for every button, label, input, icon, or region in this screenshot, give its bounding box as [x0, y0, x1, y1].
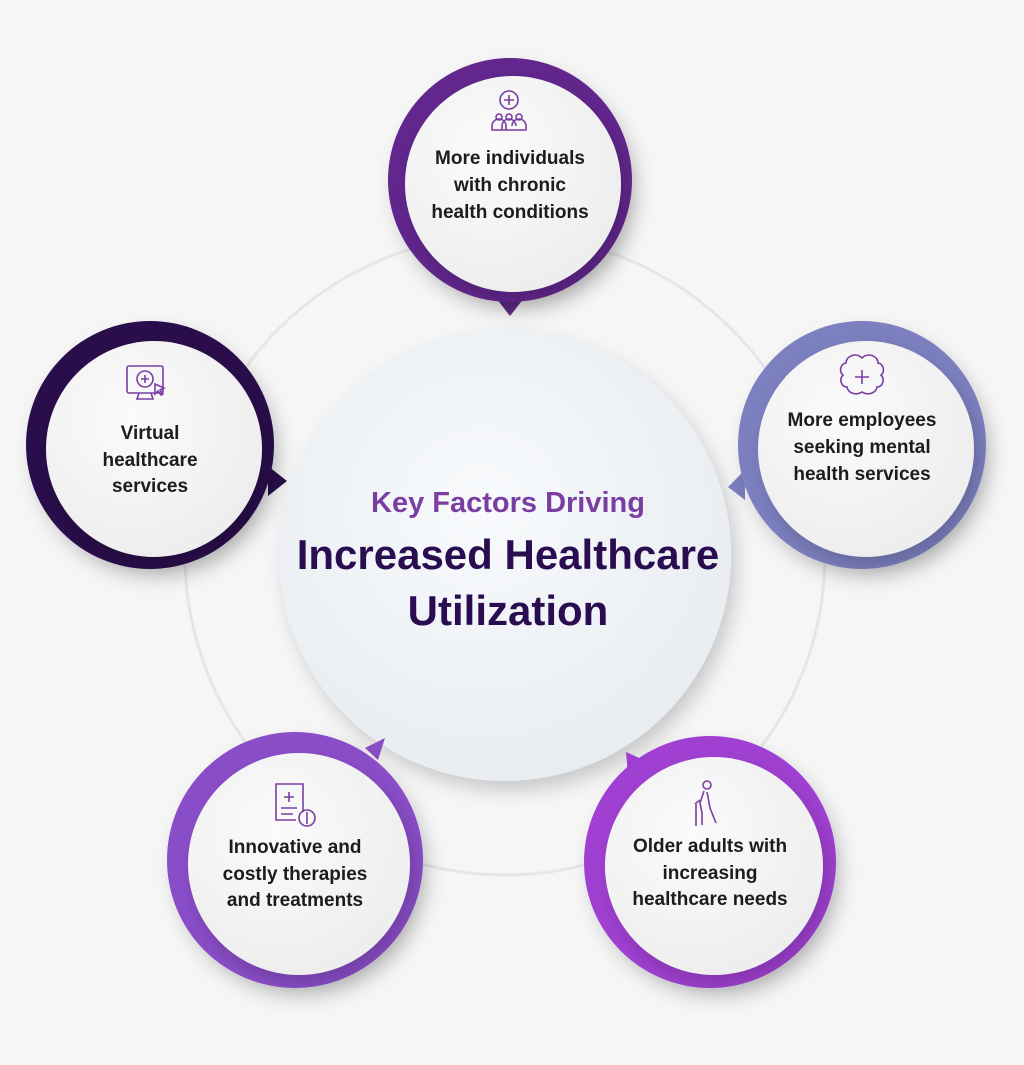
panel: older adults: Older adults with — [633, 836, 787, 857]
icon: people with cross — [492, 91, 526, 130]
panel: therapies: and treatments — [227, 890, 363, 911]
panel: chronic conditions: More individuals — [435, 148, 585, 169]
panel: chronic conditions: health conditions — [431, 202, 589, 223]
panel: older adults: healthcare needs — [632, 889, 788, 910]
panel: mental health: seeking mental — [793, 437, 931, 458]
panel: virtual healthcare — [26, 321, 287, 569]
panel: chronic conditions — [388, 58, 632, 316]
title: Utilization — [408, 587, 608, 634]
panel: therapies: Innovative and — [228, 837, 362, 858]
panel: therapies: costly therapies — [223, 864, 367, 885]
panel: therapies — [167, 732, 423, 988]
title — [297, 487, 719, 634]
panel: older adults — [584, 736, 836, 988]
icon: elderly person with cane — [695, 781, 716, 826]
icon: document with dollar — [276, 784, 315, 826]
background ring — [185, 235, 825, 875]
title: Increased Healthcare — [297, 531, 719, 578]
center circle — [279, 329, 731, 781]
icon: monitor with cross — [127, 366, 164, 399]
panel: virtual healthcare: services — [112, 476, 188, 497]
title: Key Factors Driving — [371, 487, 645, 519]
panel: virtual healthcare: healthcare — [102, 450, 198, 471]
panel: mental health: More employees — [788, 410, 936, 431]
icon: brain — [841, 355, 883, 394]
panel: chronic conditions: with chronic — [453, 175, 566, 196]
panel: virtual healthcare: Virtual — [121, 423, 179, 444]
panel: mental health — [728, 321, 986, 569]
panel: mental health: health services — [793, 464, 931, 485]
panel: older adults: increasing — [662, 863, 758, 884]
